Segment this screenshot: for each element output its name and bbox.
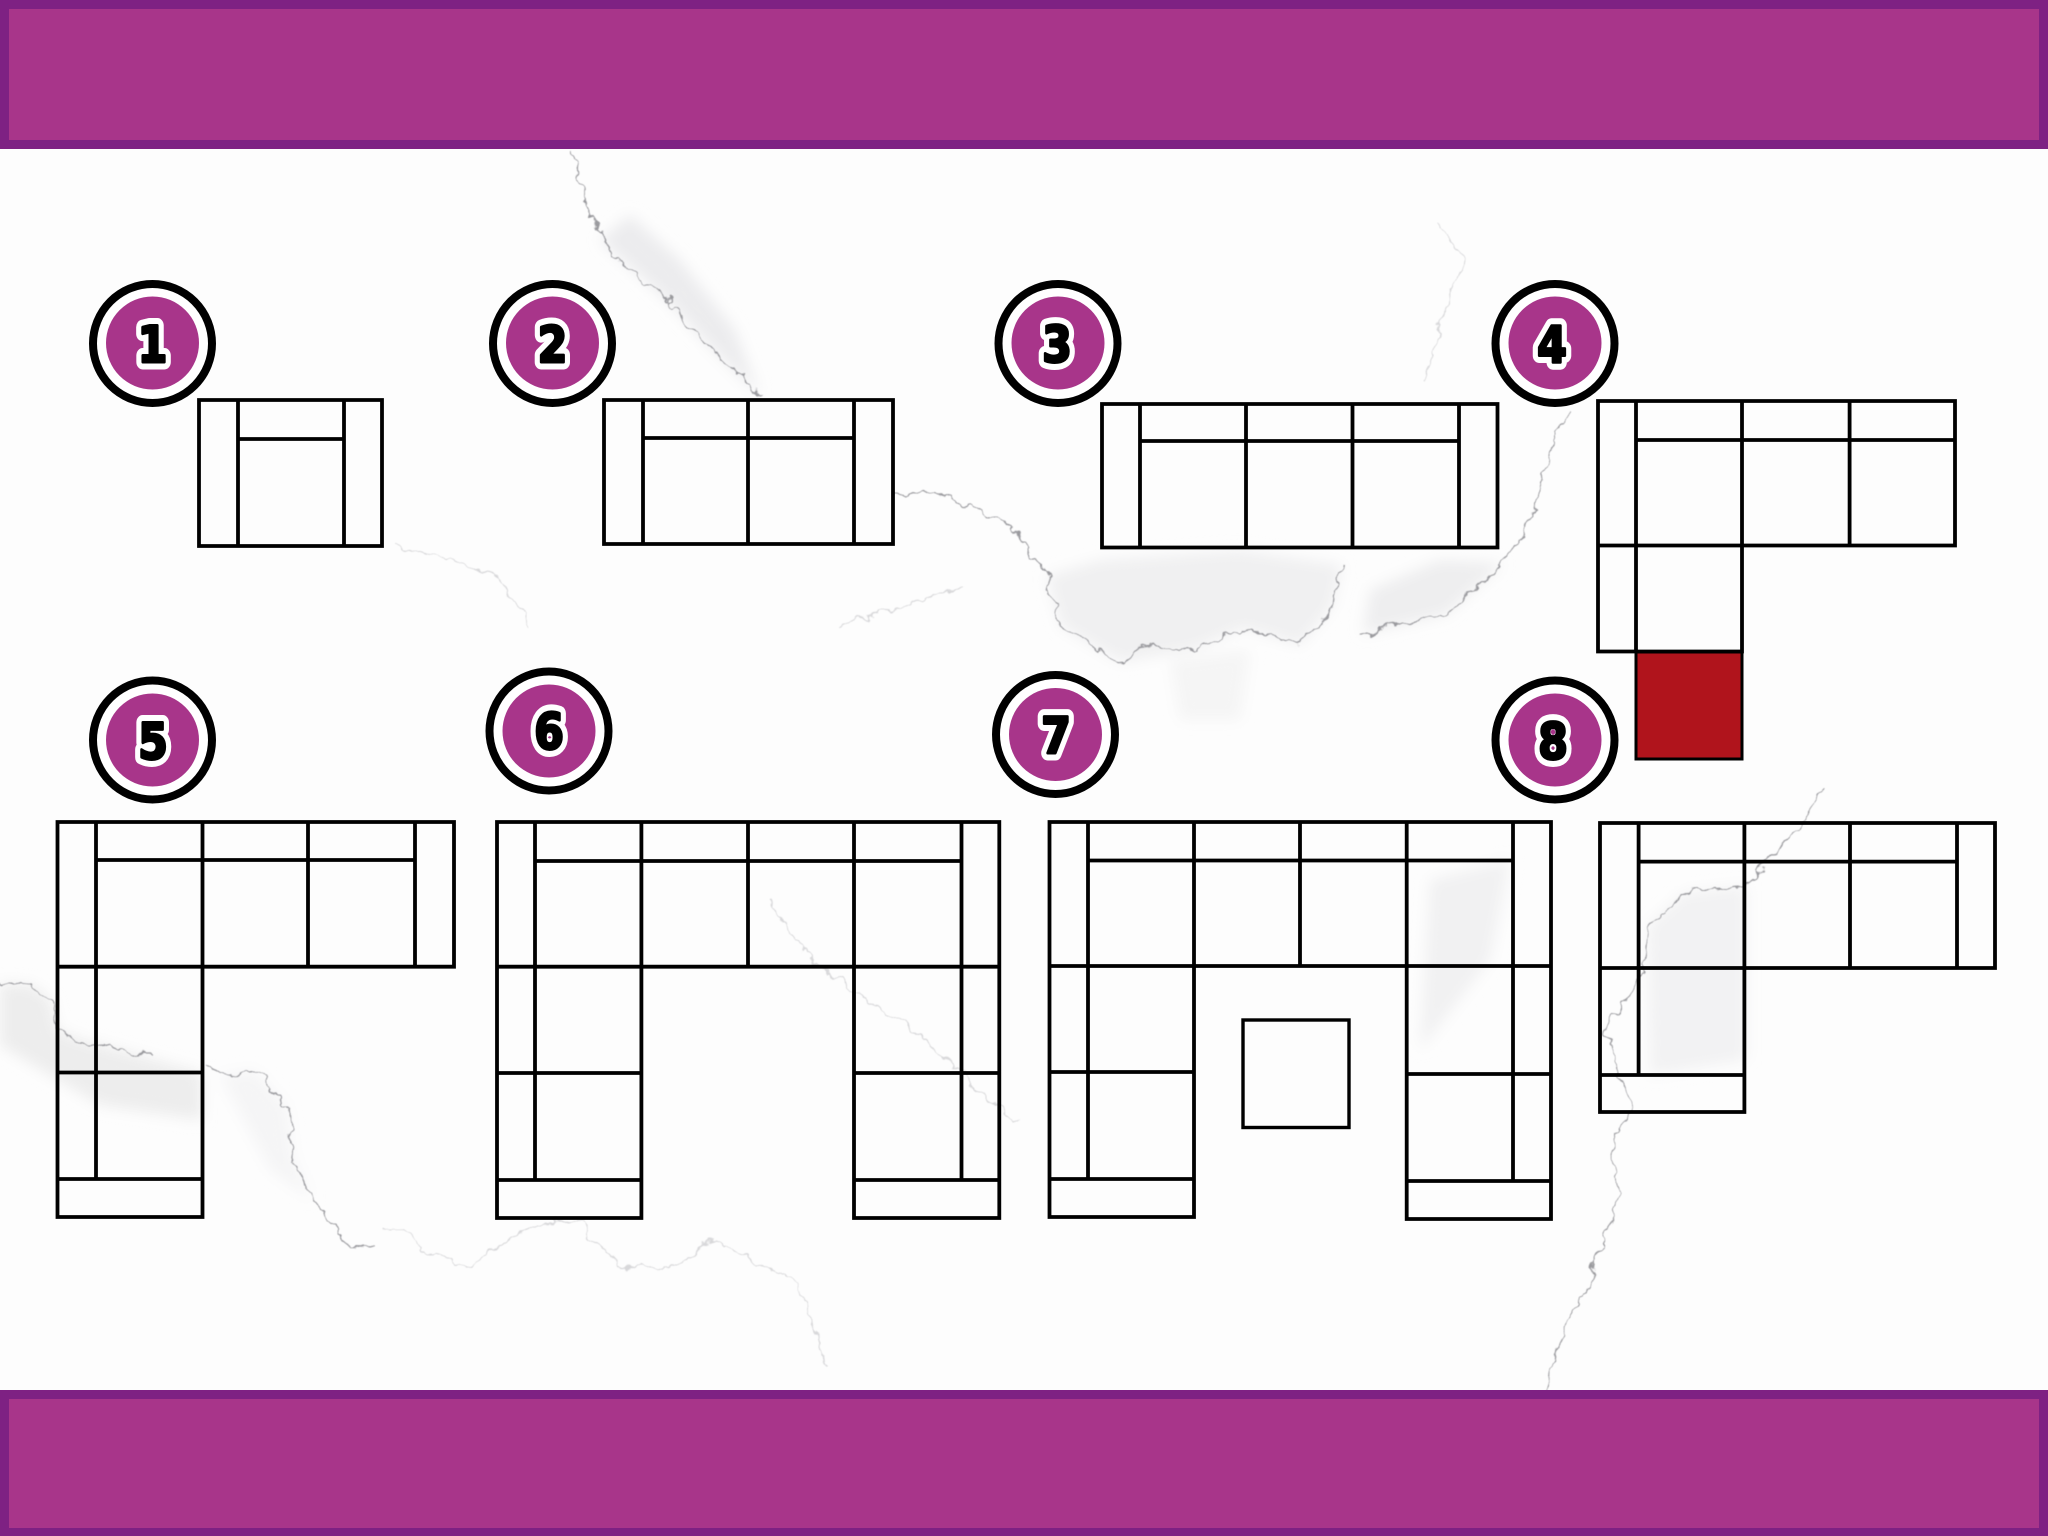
option 6: U-shaped sectional: [490, 672, 999, 1218]
number badge 3: 3: [1042, 316, 1072, 374]
option 3: three-seater: [998, 284, 1498, 548]
sofa outline 2: [604, 400, 893, 544]
number badge 6: [490, 672, 608, 790]
sofa outline 8: [1600, 823, 1995, 1112]
sofa outline 6: [497, 822, 999, 1218]
option 7: U-shaped sectional with ottoman: [996, 675, 1551, 1219]
number badge 6: 6: [534, 703, 564, 761]
number badge 2: [493, 284, 612, 403]
number badge 3: [998, 284, 1118, 403]
number badge 2: 2: [538, 316, 567, 374]
number badge 8: [1496, 680, 1614, 800]
number badge 8: 8: [1538, 713, 1568, 771]
option 8: chaise sectional: [1496, 680, 1995, 1112]
number badge 7: 7: [1041, 707, 1071, 765]
number badge 5: 5: [138, 713, 168, 771]
number badge 7: [996, 675, 1115, 794]
option 4: corner sofa with red ottoman: [1496, 284, 1955, 759]
centre ottoman: [1243, 1020, 1349, 1128]
number badge 5: 5: [138, 713, 168, 771]
number badge 3: 3: [1042, 316, 1072, 374]
sofa outline 7: [1050, 822, 1551, 1219]
number badge 1: 1: [138, 316, 167, 374]
number badge 1: 1: [138, 316, 167, 374]
red ottoman: [1636, 652, 1742, 759]
number badge 1: [93, 284, 212, 403]
number badge 8: 8: [1538, 713, 1568, 771]
number badge 4: [1496, 284, 1614, 403]
number badge 5: [93, 680, 212, 800]
sofa outline 1: [199, 400, 382, 546]
option 5: chaise sectional with right arm: [58, 680, 454, 1217]
sofa outline 4: [1598, 401, 1955, 652]
number badge 4: 4: [1537, 316, 1567, 374]
option 1: armchair: [93, 284, 382, 546]
bottom banner: [0, 1390, 2048, 1536]
sofa outline 5: [58, 822, 454, 1217]
number badge 4: 4: [1537, 316, 1567, 374]
number badge 2: 2: [538, 316, 567, 374]
number badge 6: 6: [534, 703, 564, 761]
option 2: two-seater: [493, 284, 893, 544]
top banner: [0, 0, 2048, 149]
sofa outline 3: [1102, 404, 1498, 548]
number badge 7: 7: [1041, 707, 1071, 765]
